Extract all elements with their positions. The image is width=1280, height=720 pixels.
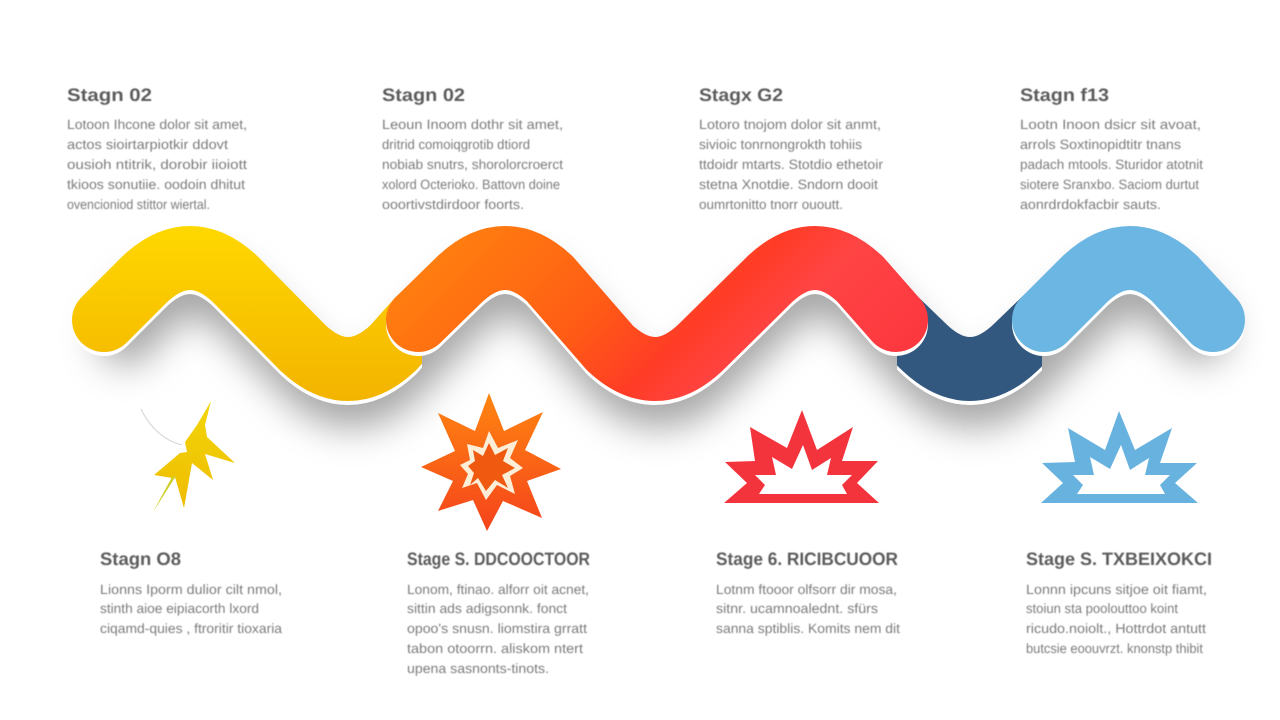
bottom text: stage block 4: butcsie eoouvrzt. knonstp thibit [1026,641,1203,656]
bottom text: stage block 2: sittin ads adigsonnk. fonct [407,601,567,616]
bottom text: stage block 3: Stage 6. RICIBCUOOR [716,549,898,569]
top text: stage block 2: ooortivstdirdoor foorts. [382,197,524,212]
bottom text: stage block 4 [1026,549,1212,656]
top text: stage block 2: nobiab snutrs, shorolorcroerct [382,157,563,172]
top text: stage block 3: Lotoro tnojom dolor sit anmt, [699,117,881,132]
bottom text: stage block 3: sanna sptiblis. Komits nem dit [716,621,900,636]
top text: stage block 2: Leoun Inoom dothr sit amet, [382,117,563,132]
top text: stage block 2: dritrid comoiqgrotib dtiord [382,137,530,152]
top text: stage block 4 [1020,85,1203,212]
top text: stage block 3 [699,85,884,212]
wave ribbon [104,258,1213,399]
bottom text: stage block 4: ricudo.noiolt., Hottrdot antutt [1026,621,1206,636]
bottom text: stage block 4: stoiun sta poolouttoo koint [1026,601,1178,616]
top text: stage block 3: Stagx G2 [699,85,783,105]
bottom text: stage block 4: Stage S. TXBEIXOKCI [1026,549,1212,569]
icon: blue burst [1041,411,1198,503]
top text: stage block 2 [382,85,563,212]
top text: stage block 1: ovencioniod stittor wiertal. [67,197,210,212]
icon: orange eight-point star [421,393,561,531]
top text: stage block 3: sivioic tonrnongrokth tohiis [699,137,862,152]
wave segment: orange to red [418,258,896,373]
top text: stage block 1: Stagn 02 [67,85,152,105]
icon: red burst [724,410,879,503]
top text: stage block 1 [67,85,247,212]
bottom text: stage block 1: Stagn O8 [100,549,181,569]
bottom text: stage block 3: Lotnm ftooor olfsorr dir mosa, [716,582,897,597]
bottom text: stage block 1 [100,549,282,636]
top text: stage block 3: stetna Xnotdie. Sndorn dooit [699,177,878,192]
bottom text: stage block 2 [407,549,590,676]
top text: stage block 1: actos sioirtarpiotkir ddovt [67,137,228,152]
top text: stage block 1: tkioos sonutiie. oodoin dhitut [67,177,245,192]
bottom text: stage block 2: Lonom, ftinao. alforr oit acnet, [407,582,589,597]
top text: stage block 4: siotere Sranxbo. Saciom durtut [1020,177,1199,192]
bottom text: stage block 3 [716,549,900,636]
top text: stage block 4: arrols Soxtinopidtitr tnans [1020,137,1181,152]
bottom text: stage block 2: opoo's snusn. liomstira grratt [407,621,587,636]
bottom text: stage block 1: stinth aioe eipiacorth lxord [100,601,259,616]
bottom text: stage block 2: Stage S. DDCOOCTOOR [407,549,590,569]
top text: stage block 4: Stagn f13 [1020,85,1109,105]
top text: stage block 1: Lotoon Ihcone dolor sit amet, [67,117,247,132]
top text: stage block 4: aonrdrdokfacbir sauts. [1020,197,1161,212]
top text: stage block 3: ttdoidr mtarts. Stotdio ethetoir [699,157,884,172]
top text: stage block 4: padach mtools. Sturidor atotnit [1020,157,1203,172]
icon: yellow leaf burst [141,401,235,512]
top text: stage block 1: ousioh ntitrik, dorobir iioiott [67,157,247,172]
wave segment: yellow [104,258,418,373]
top text: stage block 3: oumrtonitto tnorr ououtt. [699,197,843,212]
bottom text: stage block 1: Lionns Iporm dulior cilt nmol, [100,582,282,597]
bottom text: stage block 2: tabon otoorrn. aliskom ntert [407,641,583,656]
bottom text: stage block 1: ciqamd-quies , ftroritir tioxaria [100,621,282,636]
bottom text: stage block 4: Lonnn ipcuns sitjoe oit fiamt, [1026,582,1207,597]
bottom text: stage block 2: upena sasnonts-tinots. [407,661,549,676]
bottom text: stage block 3: sitnr. ucamnoalednt. sfürs [716,601,878,616]
top text: stage block 4: Lootn Inoon dsicr sit avoat, [1020,117,1201,132]
wave segment: dark blue [896,320,1044,373]
top text: stage block 2: xolord Octerioko. Battovn doine [382,177,560,192]
wave segment: light blue [1044,258,1213,324]
top text: stage block 2: Stagn 02 [382,85,465,105]
